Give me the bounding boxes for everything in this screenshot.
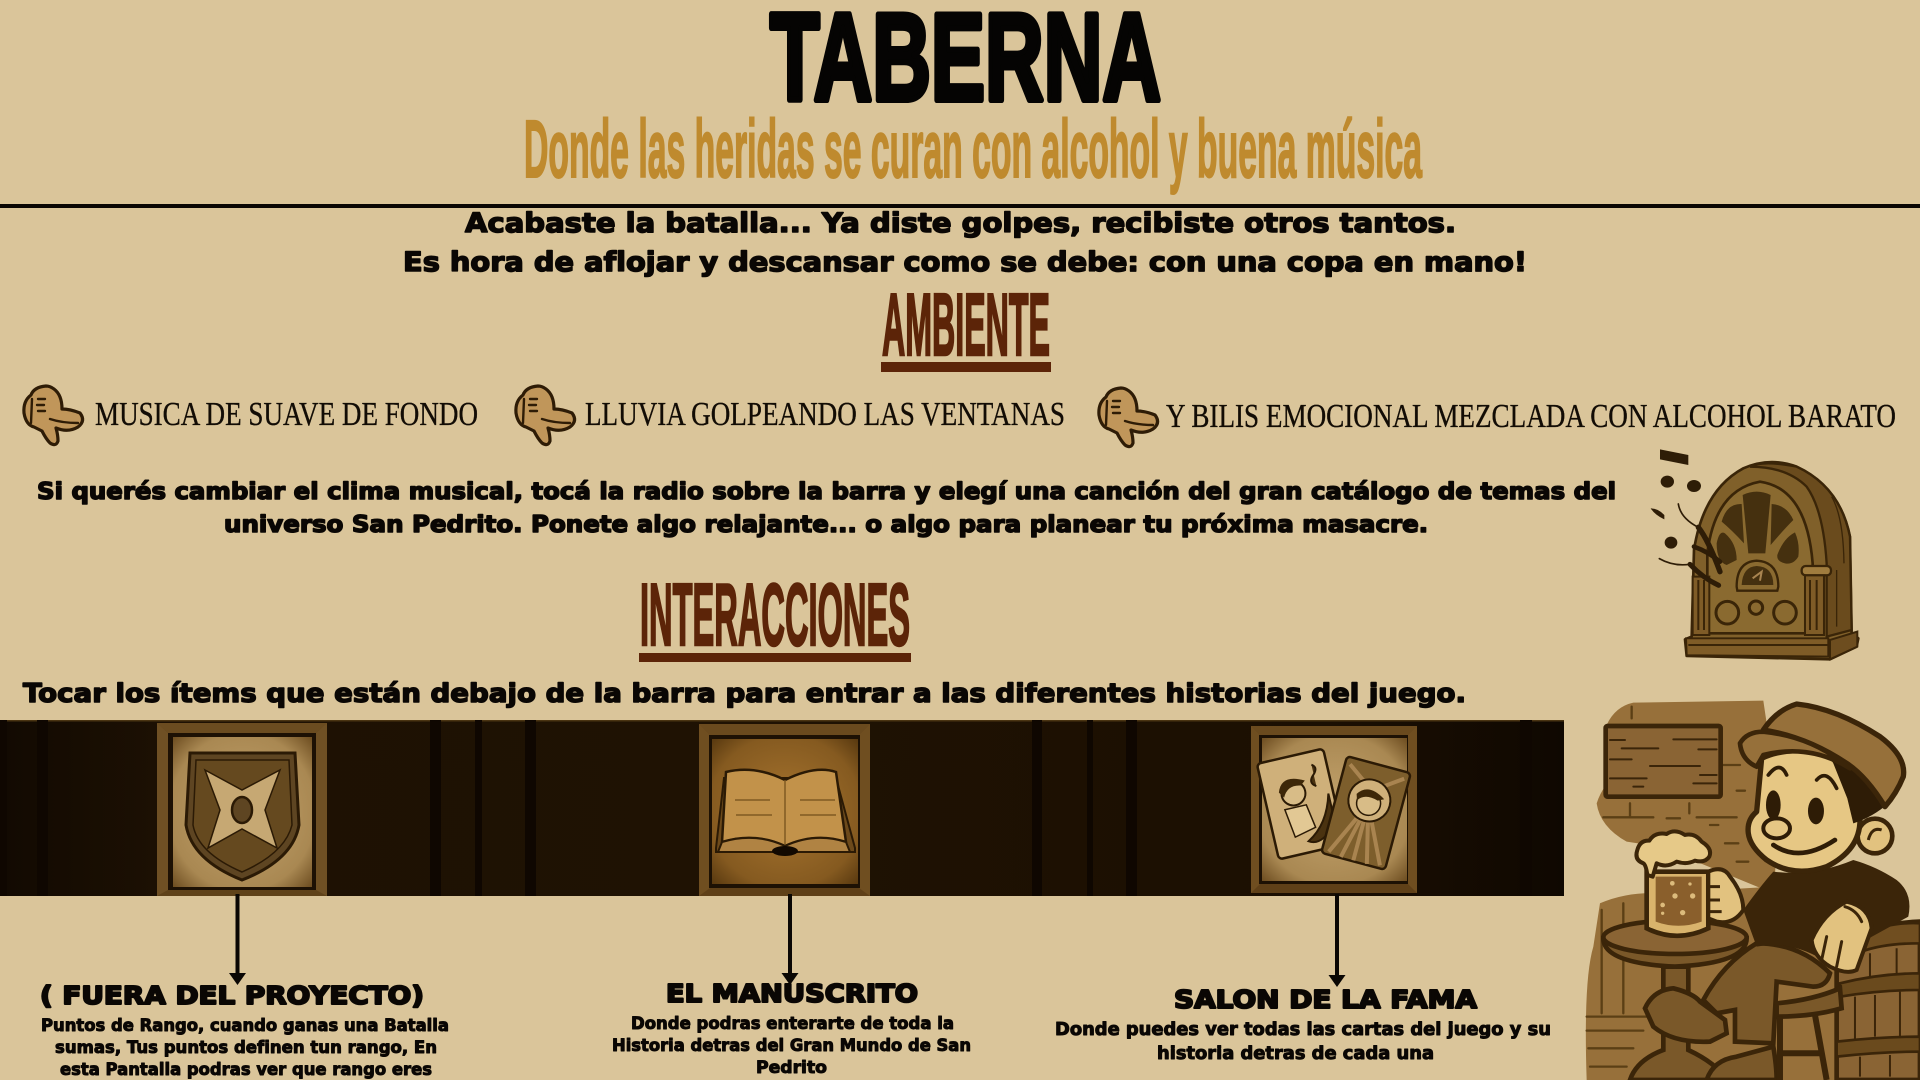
column: fuera del proyecto: ( FUERA DEL PROYECTO) <box>40 981 424 1010</box>
cap <box>1740 704 1904 807</box>
arrow: fuera del proyecto <box>229 894 246 985</box>
column: salon de la fama: Donde puedes ver todas las cartas del juego y su <box>1055 1020 1551 1040</box>
column: fuera del proyecto <box>40 981 449 1080</box>
radio paragraph: universo San Pedrito. Ponete algo relajante... o algo para planear tu próxima masacre. <box>224 512 1428 538</box>
radio paragraph <box>37 479 1616 538</box>
left hand <box>1708 869 1743 922</box>
ambiente item: bilis <box>1099 388 1896 447</box>
dial <box>1737 561 1778 591</box>
ear <box>1858 819 1892 853</box>
pillars <box>1802 566 1831 575</box>
intro text: Acabaste la batalla... Ya diste golpes, recibiste otros tantos. <box>465 208 1456 239</box>
card left <box>1257 749 1345 859</box>
wooden sign <box>1606 726 1721 797</box>
ambiente item: lluvia: LLUVIA GOLPEANDO LAS VENTANAS <box>585 396 1065 433</box>
table <box>1603 921 1747 1080</box>
column: el manuscrito <box>612 979 971 1078</box>
column: salon de la fama <box>1055 985 1551 1064</box>
ambiente item: musica: MUSICA DE SUAVE DE FONDO <box>95 396 478 433</box>
torso <box>1743 860 1909 960</box>
panel: wooden bar <box>0 720 1564 896</box>
icon: shield frame <box>157 723 327 896</box>
ambiente item: musica <box>24 386 478 445</box>
divider line <box>0 204 1920 208</box>
column: el manuscrito: EL MANUSCRITO <box>666 979 918 1008</box>
arrow: manuscrito <box>782 894 798 985</box>
heading: ambiente <box>881 275 1051 374</box>
legs and shoe <box>1645 943 1830 1080</box>
hair <box>1830 755 1888 823</box>
eyes, nose and smile <box>1763 767 1837 853</box>
text: INTERACCIONES <box>640 565 910 664</box>
grille <box>1717 492 1799 565</box>
ambiente item: lluvia <box>516 386 1065 445</box>
column: el manuscrito: Pedrito <box>756 1058 827 1078</box>
column: fuera del proyecto: sumas, Tus puntos definen tun rango, En <box>55 1038 437 1058</box>
radio paragraph: Si querés cambiar el clima musical, tocá la radio sobre la barra y elegí una canción del gran catálogo de temas del <box>37 479 1616 505</box>
column: salon de la fama: SALON DE LA FAMA <box>1174 985 1478 1014</box>
icon: radio <box>1651 449 1858 659</box>
cabinet <box>1685 462 1858 659</box>
floor and barrel background <box>1586 887 1920 1080</box>
column: fuera del proyecto: Puntos de Rango, cuando ganas una Batalla <box>41 1016 449 1036</box>
icon: cards frame <box>1251 726 1417 893</box>
heading: interacciones <box>639 565 911 664</box>
instruction text: Tocar los ítems que están debajo de la barra para entrar a las diferentes historias del juego. <box>23 679 1466 709</box>
barrel <box>1837 922 1920 1080</box>
column: fuera del proyecto: esta Pantalla podras ver que rango eres <box>60 1060 432 1080</box>
stool <box>1777 988 1842 1080</box>
beer mug <box>1636 831 1710 936</box>
knobs <box>1716 601 1796 624</box>
illustration: character with beer <box>1586 701 1920 1080</box>
card right <box>1321 756 1411 870</box>
text: AMBIENTE <box>882 275 1050 374</box>
column: salon de la fama: historia detras de cada una <box>1157 1044 1434 1064</box>
arrow: salon de la fama <box>1328 894 1346 987</box>
intro text: Es hora de aflojar y descansar como se debe: con una copa en mano! <box>403 247 1527 278</box>
intro text <box>403 208 1527 278</box>
music notes and smoke <box>1651 449 1701 549</box>
face <box>1748 751 1860 871</box>
wall background <box>1597 701 1780 893</box>
column: el manuscrito: Historia detras del Gran Mundo de San <box>612 1036 971 1056</box>
icon: book frame <box>699 724 870 896</box>
column: el manuscrito: Donde podras enterarte de toda la <box>631 1014 954 1034</box>
right hand <box>1812 902 1872 972</box>
